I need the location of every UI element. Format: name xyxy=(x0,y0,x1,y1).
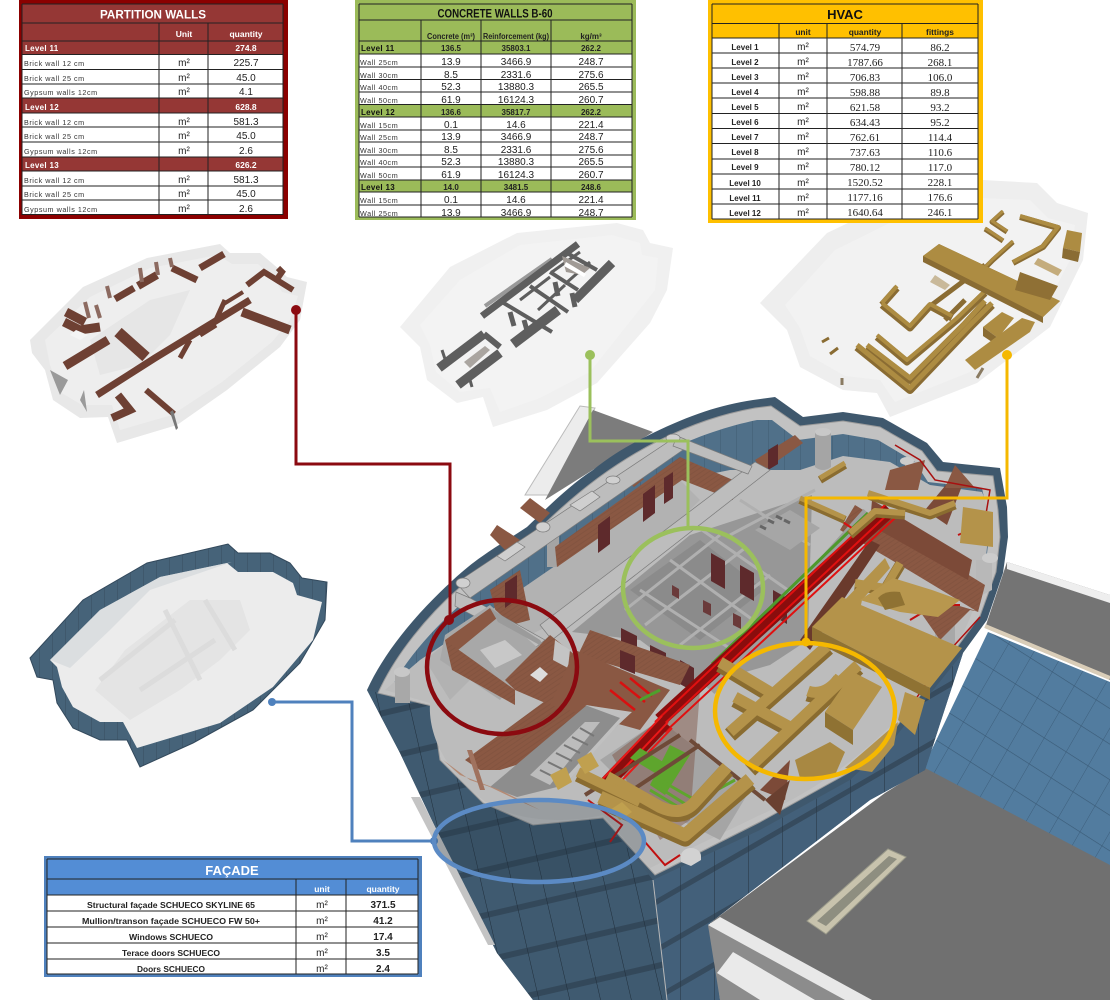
table: partition walls: Unit xyxy=(176,29,192,39)
highlight ellipse: partition walls xyxy=(427,600,577,734)
table: HVAC: 106.0 xyxy=(928,72,953,84)
table: concrete walls B-60: Wall 25cm xyxy=(360,209,398,218)
table: partition walls: 45.0 xyxy=(236,73,256,84)
table: HVAC: 706.83 xyxy=(850,72,881,84)
building: east brick rooms xyxy=(600,460,985,840)
table: concrete walls B-60: 248.7 xyxy=(578,132,604,143)
table: concrete walls B-60: 275.6 xyxy=(578,145,604,156)
model: HVAC level xyxy=(760,180,1088,417)
table: concrete walls B-60: Concrete (m³) xyxy=(427,32,475,41)
table: concrete walls B-60: 14.6 xyxy=(506,195,526,206)
table: HVAC: m² xyxy=(797,42,809,53)
table: concrete walls B-60: 8.5 xyxy=(444,145,458,156)
table: concrete walls B-60: 248.6 xyxy=(581,183,602,192)
table: HVAC: 89.8 xyxy=(930,87,950,99)
table: partition walls: 225.7 xyxy=(233,58,259,69)
building: rear triangle xyxy=(525,406,653,500)
table: partition walls: 45.0 xyxy=(236,189,256,200)
table: HVAC: Level 4 xyxy=(731,88,759,97)
building: floor-edge column xyxy=(681,848,701,866)
table: concrete walls B-60: 3466.9 xyxy=(501,208,532,219)
table: HVAC: m² xyxy=(797,72,809,83)
table: HVAC: m² xyxy=(797,162,809,173)
table: partition walls: m² xyxy=(178,175,190,186)
table: concrete walls B-60 xyxy=(355,0,636,220)
table: facade xyxy=(44,856,422,977)
table: partition walls: Brick wall 12 cm xyxy=(24,118,85,127)
table: HVAC: 574.79 xyxy=(850,42,881,54)
table: facade: 3.5 xyxy=(376,948,390,959)
table: HVAC: 1640.64 xyxy=(847,207,883,219)
table: HVAC: Level 1 xyxy=(731,43,759,52)
table: concrete walls B-60: 61.9 xyxy=(441,170,461,181)
table: concrete walls B-60: Wall 50cm xyxy=(360,171,398,180)
table: concrete walls B-60: Wall 25cm xyxy=(360,133,398,142)
table: HVAC: 1787.66 xyxy=(847,57,883,69)
table: partition walls: m² xyxy=(178,146,190,157)
table: facade: Structural façade SCHUECO SKYLINE 65 xyxy=(87,900,255,910)
table: concrete walls B-60: 61.9 xyxy=(441,95,461,106)
table: concrete walls B-60: 2331.6 xyxy=(501,70,532,81)
table: partition walls: 45.0 xyxy=(236,131,256,142)
table: concrete walls B-60: 14.6 xyxy=(506,120,526,131)
building: inner glass wall and rim xyxy=(378,406,1000,875)
table: partition walls: m² xyxy=(178,189,190,200)
table: HVAC: 246.1 xyxy=(928,207,952,219)
table: partition walls: m² xyxy=(178,204,190,215)
table: concrete walls B-60: 13.9 xyxy=(441,57,461,68)
table: HVAC: 598.88 xyxy=(850,87,881,99)
table: HVAC: Level 2 xyxy=(731,58,759,67)
table: partition walls: m² xyxy=(178,87,190,98)
table: HVAC: m² xyxy=(797,178,809,189)
table: concrete walls B-60: 265.5 xyxy=(578,157,604,168)
table: concrete walls B-60: 14.0 xyxy=(443,183,459,192)
highlight ellipse: concrete walls xyxy=(623,528,763,648)
table: facade: Mullion/transon façade SCHUECO FW 50+ xyxy=(82,916,260,926)
building: brick partition walls north xyxy=(490,435,803,628)
table: concrete walls B-60: 0.1 xyxy=(444,120,458,131)
table: partition walls: PARTITION WALLS xyxy=(100,8,206,22)
table: partition walls: Brick wall 12 cm xyxy=(24,59,85,68)
table: concrete walls B-60: 275.6 xyxy=(578,70,604,81)
table: facade: m² xyxy=(316,916,328,927)
table: concrete walls B-60: 16124.3 xyxy=(498,170,535,181)
table: partition walls: Level 13 xyxy=(25,161,59,170)
table: HVAC: Level 10 xyxy=(729,179,761,188)
table: partition walls: 274.8 xyxy=(235,43,257,53)
table: partition walls: Brick wall 25 cm xyxy=(24,190,85,199)
table: partition walls: Brick wall 25 cm xyxy=(24,74,85,83)
building: south green pipes and brick beams xyxy=(585,735,790,815)
table: concrete walls B-60: Wall 15cm xyxy=(360,196,398,205)
highlight ellipse: HVAC xyxy=(715,643,895,779)
table: partition walls: 2.6 xyxy=(239,146,253,157)
table: partition walls: Brick wall 25 cm xyxy=(24,132,85,141)
table: HVAC: Level 6 xyxy=(731,118,759,127)
table: concrete walls B-60: Level 13 xyxy=(361,183,395,192)
table: HVAC: HVAC xyxy=(827,7,864,22)
table: partition walls: 626.2 xyxy=(235,160,257,170)
table: HVAC: 110.6 xyxy=(928,147,953,159)
table: HVAC: 95.2 xyxy=(930,117,950,129)
table: concrete walls B-60: Wall 30cm xyxy=(360,146,398,155)
table: concrete walls B-60: 221.4 xyxy=(578,120,604,131)
table: facade: m² xyxy=(316,900,328,911)
connector: partition walls xyxy=(291,305,454,625)
table: partition walls: Level 12 xyxy=(25,103,59,112)
table: concrete walls B-60: 52.3 xyxy=(441,82,461,93)
table: concrete walls B-60: 0.1 xyxy=(444,195,458,206)
table: concrete walls B-60: 136.5 xyxy=(441,44,462,53)
model: partition walls level xyxy=(30,244,307,443)
table: partition walls: Gypsum walls 12cm xyxy=(24,88,98,97)
table: HVAC: 1177.16 xyxy=(847,192,883,204)
table: HVAC xyxy=(708,0,983,223)
table: concrete walls B-60: Wall 30cm xyxy=(360,71,398,80)
table: concrete walls B-60: kg/m³ xyxy=(580,32,602,41)
table: HVAC: m² xyxy=(797,147,809,158)
table: partition walls: Level 11 xyxy=(25,44,59,53)
table: facade: Terace doors SCHUECO xyxy=(122,948,220,958)
table: HVAC: 176.6 xyxy=(928,192,953,204)
table: HVAC: 780.12 xyxy=(850,162,880,174)
model: facade level xyxy=(30,544,327,767)
table: HVAC: Level 12 xyxy=(729,209,761,218)
table: HVAC: m² xyxy=(797,102,809,113)
building: concrete beams xyxy=(455,434,770,648)
table: HVAC: 114.4 xyxy=(928,132,953,144)
table: HVAC: quantity xyxy=(849,27,882,37)
table: HVAC: m² xyxy=(797,57,809,68)
table: partition walls: Gypsum walls 12cm xyxy=(24,205,98,214)
table: concrete walls B-60: 260.7 xyxy=(578,170,604,181)
table: facade: m² xyxy=(316,964,328,975)
table: facade: quantity xyxy=(366,884,400,894)
table: concrete walls B-60: 35803.1 xyxy=(502,44,531,53)
table: concrete walls B-60: 13.9 xyxy=(441,132,461,143)
table: HVAC: Level 3 xyxy=(731,73,759,82)
table: concrete walls B-60: 13.9 xyxy=(441,208,461,219)
table: facade: FAÇADE xyxy=(205,863,259,878)
table: HVAC: 117.0 xyxy=(928,162,953,174)
table: HVAC: 93.2 xyxy=(930,102,950,114)
table: partition walls: Brick wall 12 cm xyxy=(24,176,85,185)
table: facade: unit xyxy=(314,884,330,894)
table: partition walls: m² xyxy=(178,58,190,69)
table: concrete walls B-60: 2331.6 xyxy=(501,145,532,156)
table: concrete walls B-60: Wall 15cm xyxy=(360,121,398,130)
table: concrete walls B-60: Wall 25cm xyxy=(360,58,398,67)
table: HVAC: 1520.52 xyxy=(847,177,883,189)
table: partition walls: 4.1 xyxy=(239,87,253,98)
building: right wing with glass roof xyxy=(710,562,1110,1000)
table: HVAC: 762.61 xyxy=(850,132,880,144)
table: concrete walls B-60: 136.6 xyxy=(441,108,462,117)
table: concrete walls B-60: 3466.9 xyxy=(501,132,532,143)
table: HVAC: 737.63 xyxy=(850,147,881,159)
table: facade: 371.5 xyxy=(370,900,396,911)
table: HVAC: 86.2 xyxy=(930,42,950,54)
table: concrete walls B-60: 13880.3 xyxy=(498,157,535,168)
table: partition walls xyxy=(19,0,288,219)
table: partition walls: 581.3 xyxy=(233,175,259,186)
table: HVAC: 621.58 xyxy=(850,102,881,114)
table: concrete walls B-60: 35817.7 xyxy=(502,108,531,117)
table: HVAC: m² xyxy=(797,208,809,219)
table: concrete walls B-60: 248.7 xyxy=(578,57,604,68)
table: HVAC: fittings xyxy=(926,27,954,37)
table: facade: Doors SCHUECO xyxy=(137,964,205,974)
table: HVAC: Level 11 xyxy=(729,194,761,203)
table: partition walls: quantity xyxy=(229,29,263,39)
table: facade: 17.4 xyxy=(373,932,393,943)
building: floor slab xyxy=(385,456,988,868)
table: concrete walls B-60: 13880.3 xyxy=(498,82,535,93)
table: HVAC: Level 5 xyxy=(731,103,759,112)
table: concrete walls B-60: 52.3 xyxy=(441,157,461,168)
table: concrete walls B-60: 262.2 xyxy=(581,44,602,53)
table: concrete walls B-60: 248.7 xyxy=(578,208,604,219)
table: facade: 2.4 xyxy=(376,964,390,975)
table: facade: m² xyxy=(316,948,328,959)
table: HVAC: Level 9 xyxy=(731,163,759,172)
table: partition walls: 581.3 xyxy=(233,117,259,128)
table: concrete walls B-60: 262.2 xyxy=(581,108,602,117)
table: concrete walls B-60: Reinforcement (kg) xyxy=(483,32,549,41)
table: HVAC: m² xyxy=(797,87,809,98)
table: HVAC: 268.1 xyxy=(928,57,952,69)
table: concrete walls B-60: 8.5 xyxy=(444,70,458,81)
building: hvac ducts xyxy=(550,463,993,838)
connector: HVAC xyxy=(802,350,1012,646)
building: main service run xyxy=(588,445,990,865)
table: concrete walls B-60: 3466.9 xyxy=(501,57,532,68)
table: facade: m² xyxy=(316,932,328,943)
table: facade: 41.2 xyxy=(373,916,393,927)
table: partition walls: m² xyxy=(178,73,190,84)
table: concrete walls B-60: Level 11 xyxy=(361,44,395,53)
table: partition walls: Gypsum walls 12cm xyxy=(24,147,98,156)
table: concrete walls B-60: Wall 40cm xyxy=(360,83,398,92)
building: brick walls south west xyxy=(440,605,690,770)
table: concrete walls B-60: 260.7 xyxy=(578,95,604,106)
table: partition walls: 2.6 xyxy=(239,204,253,215)
table: concrete walls B-60: 221.4 xyxy=(578,195,604,206)
connector: facade xyxy=(268,698,438,845)
table: concrete walls B-60: Level 12 xyxy=(361,108,395,117)
table: HVAC: m² xyxy=(797,117,809,128)
building: concrete core rooms xyxy=(572,490,820,692)
connector: concrete walls xyxy=(585,350,688,526)
table: concrete walls B-60: 265.5 xyxy=(578,82,604,93)
building: stairwell xyxy=(443,705,632,810)
table: partition walls: m² xyxy=(178,131,190,142)
table: HVAC: 634.43 xyxy=(850,117,881,129)
table: partition walls: 628.8 xyxy=(235,102,257,112)
building: columns xyxy=(394,428,998,703)
model: concrete walls level xyxy=(400,223,673,427)
table: concrete walls B-60: 16124.3 xyxy=(498,95,535,106)
table: HVAC: Level 8 xyxy=(731,148,759,157)
table: concrete walls B-60: CONCRETE WALLS B-60 xyxy=(438,8,552,20)
table: HVAC: 228.1 xyxy=(928,177,952,189)
table: HVAC: m² xyxy=(797,193,809,204)
table: HVAC: m² xyxy=(797,132,809,143)
table: concrete walls B-60: 3481.5 xyxy=(504,183,529,192)
table: partition walls: m² xyxy=(178,117,190,128)
highlight ellipse: facade xyxy=(434,800,644,882)
building: outer facade xyxy=(367,397,1008,1000)
table: HVAC: Level 7 xyxy=(731,133,759,142)
table: concrete walls B-60: Wall 50cm xyxy=(360,96,398,105)
table: facade: Windows SCHUECO xyxy=(129,932,213,942)
table: concrete walls B-60: Wall 40cm xyxy=(360,158,398,167)
table: HVAC: unit xyxy=(795,27,811,37)
